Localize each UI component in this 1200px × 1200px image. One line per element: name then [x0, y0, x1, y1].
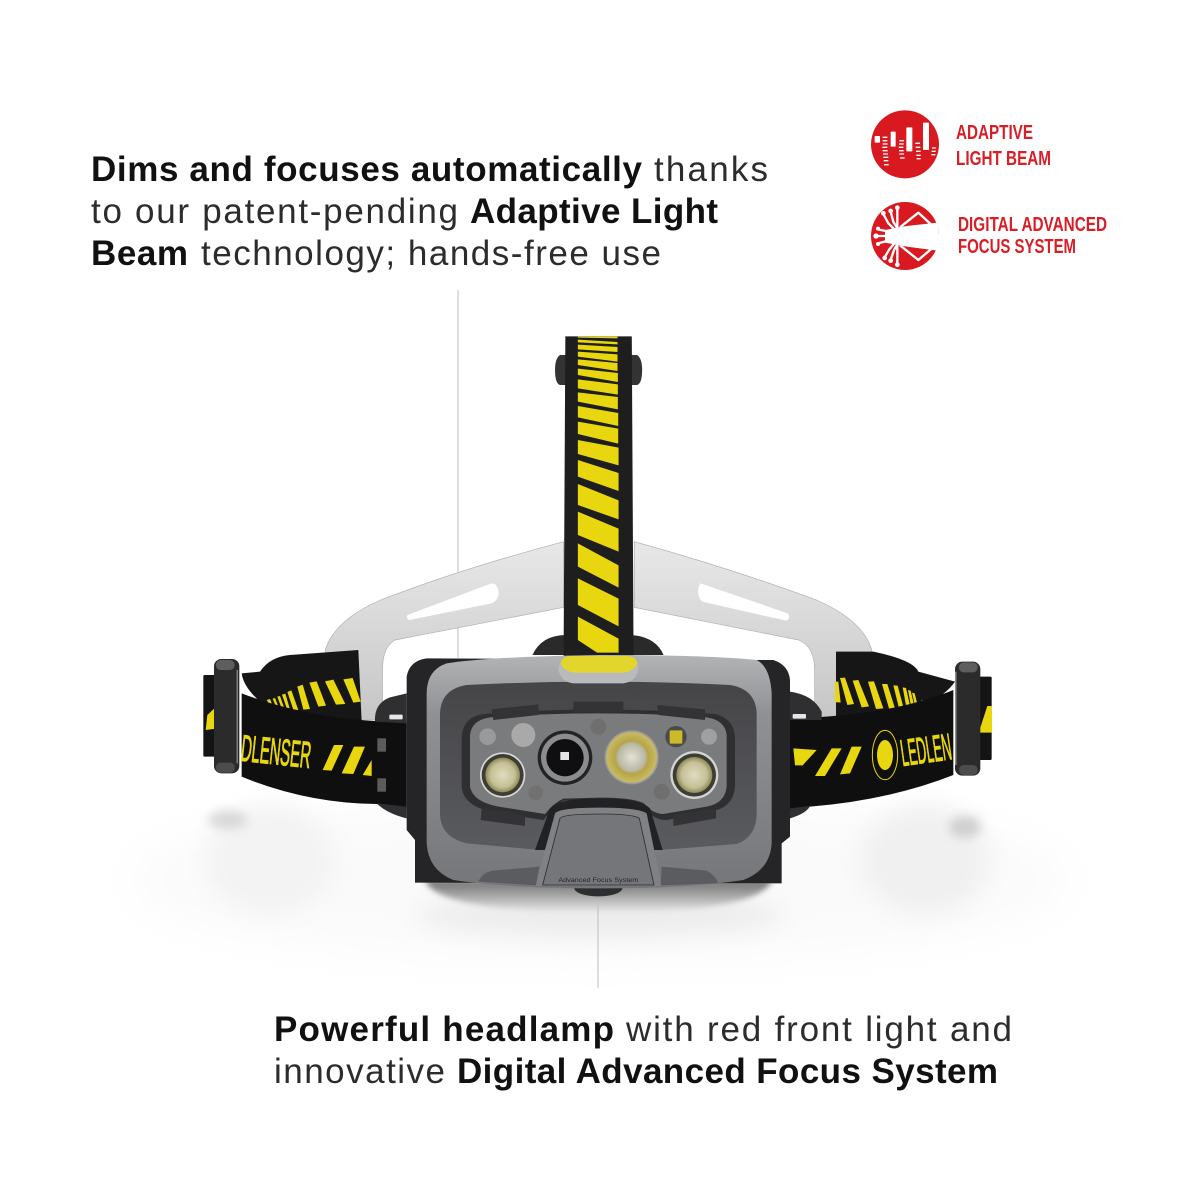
label: digital advanced focus system [958, 214, 1107, 258]
lamp body [407, 655, 790, 896]
bottom nub [574, 880, 622, 896]
rear tail and buckle, right [955, 662, 992, 776]
label: adaptive light beam: LIGHT BEAM [956, 148, 1051, 170]
floor reflection and shadow [130, 800, 1070, 960]
title: adaptive light beam callout: Beam [91, 234, 188, 273]
grey shell [427, 655, 772, 888]
title: adaptive light beam callout: Dims and focuses automatically [91, 150, 643, 189]
headlamp illustration [203, 336, 992, 896]
callout: powerful headlamp: innovative [274, 1052, 445, 1091]
top button [558, 656, 638, 683]
label: adaptive light beam: ADAPTIVE [956, 122, 1033, 144]
camera sensor [538, 730, 592, 785]
inner recess [440, 682, 757, 850]
title: adaptive light beam callout: technology; hands-free use [201, 234, 661, 273]
head bracket [325, 355, 872, 720]
leader line: bottom callout [597, 900, 599, 988]
label: digital advanced focus system: FOCUS SYSTEM [958, 236, 1076, 258]
side clip, right [790, 692, 822, 818]
badge: adaptive light beam [871, 110, 1051, 178]
tabs [481, 702, 716, 826]
right headband strap [790, 652, 992, 818]
sensor dots [479, 719, 717, 800]
callout: powerful headlamp [274, 1010, 1012, 1091]
side clip, left [375, 693, 407, 818]
callout: powerful headlamp: Powerful headlamp [274, 1010, 614, 1049]
badge: digital advanced focus system [871, 202, 1107, 270]
front band, right [790, 690, 954, 813]
callout: powerful headlamp: with red front light and [625, 1010, 1012, 1049]
back loop, left [242, 650, 362, 722]
model label: Advanced Focus System [558, 878, 638, 884]
housing [407, 658, 790, 883]
title: adaptive light beam callout [91, 150, 768, 273]
lower shell facets [478, 867, 718, 885]
callout: powerful headlamp: Digital Advanced Focus System [457, 1052, 998, 1091]
front band, left: DLENSER [239, 727, 313, 776]
icon: adaptive light beam [871, 110, 939, 178]
indicator light [665, 726, 687, 747]
title: adaptive light beam callout: to our patent-pending [91, 192, 458, 231]
label: digital advanced focus system: DIGITAL ADVANCED [958, 214, 1107, 236]
back loop, right [835, 652, 955, 719]
lens panel [470, 713, 727, 814]
label: adaptive light beam [956, 122, 1051, 170]
leader line: top callout [457, 290, 459, 658]
icon: digital focus system [871, 202, 939, 270]
LED centre [605, 730, 659, 784]
top strap with hazard stripes [564, 336, 634, 658]
left headband strap [203, 650, 407, 818]
centre housing and focus slider [535, 798, 663, 886]
rear tail and buckle, left [203, 659, 239, 773]
lens panel rim [462, 709, 735, 820]
title: adaptive light beam callout: thanks [654, 150, 768, 189]
LED left [480, 752, 525, 798]
front band, left [239, 693, 407, 810]
title: adaptive light beam callout: Adaptive Light [470, 192, 718, 231]
LED right [670, 751, 718, 799]
right headband strap: LEDLEN [898, 725, 954, 774]
